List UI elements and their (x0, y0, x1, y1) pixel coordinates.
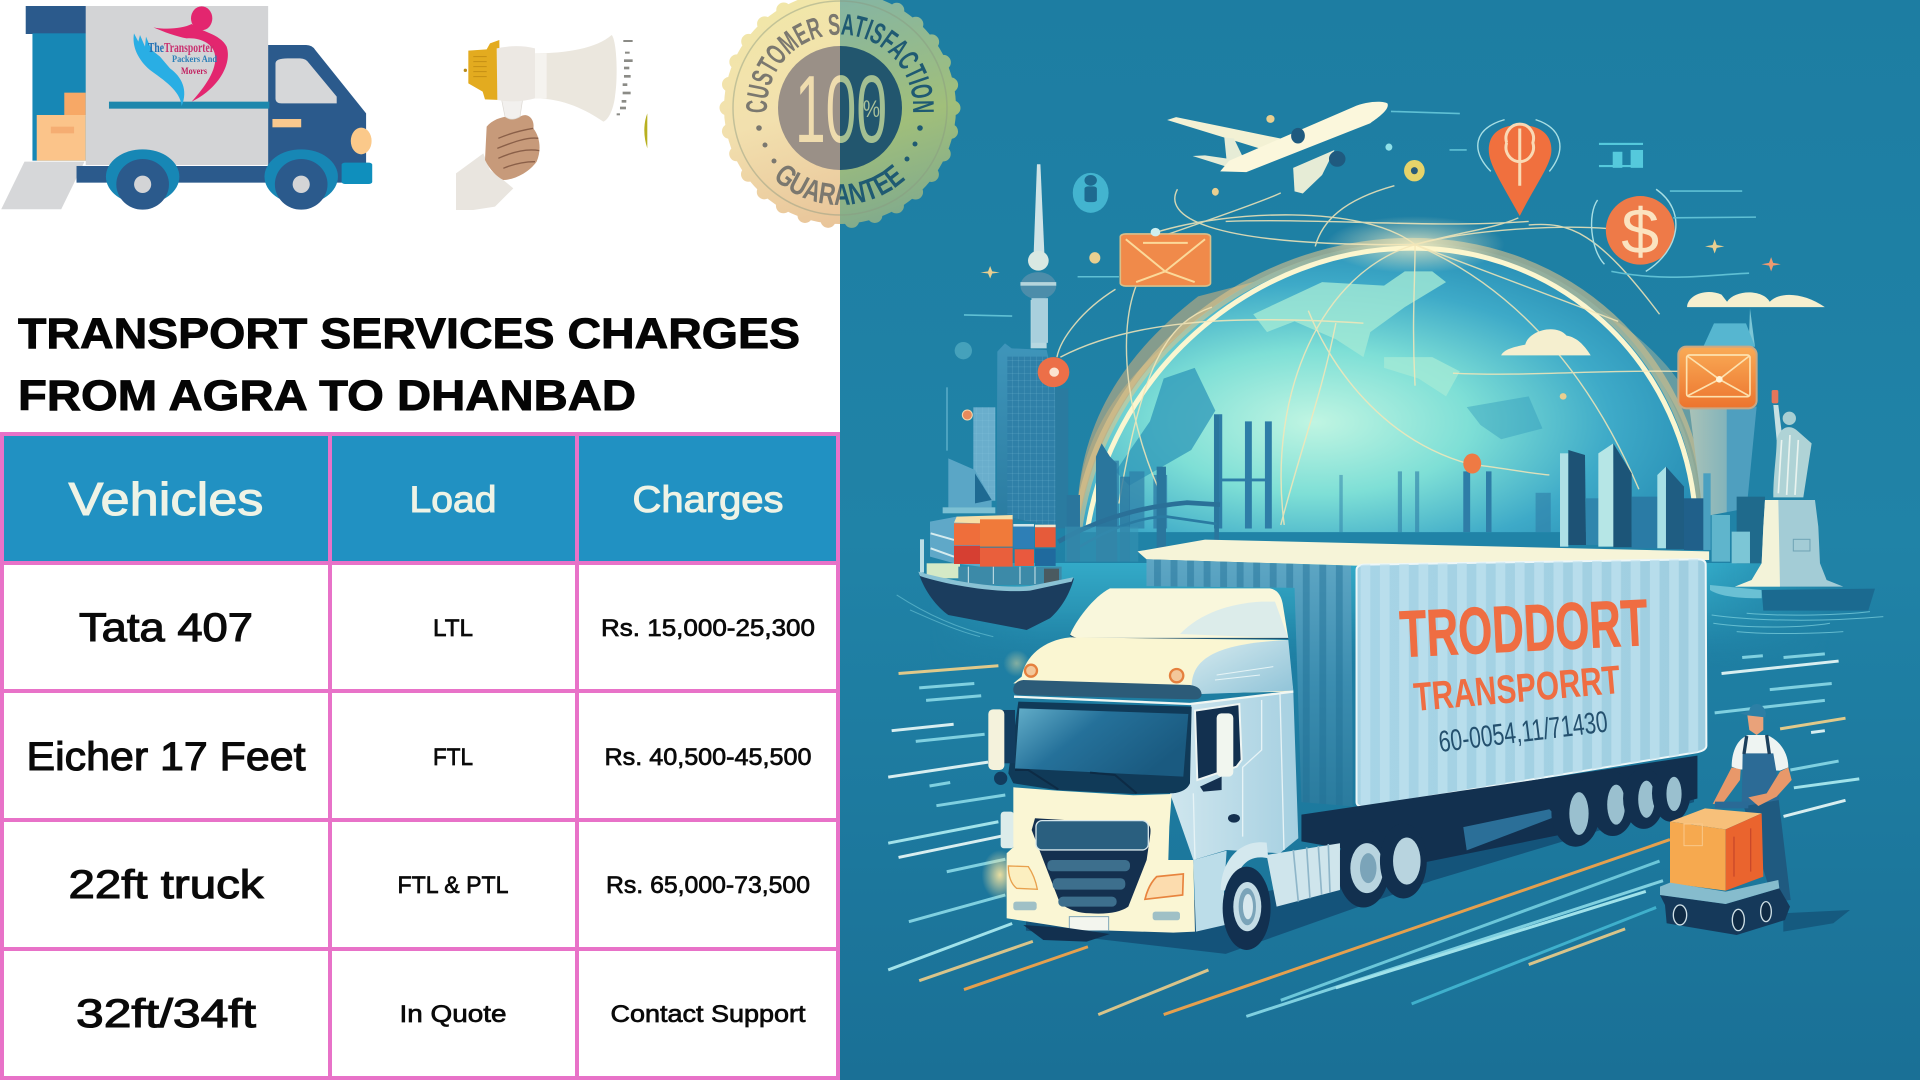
sparkles and dots (980, 115, 1781, 400)
fog lamps (1013, 902, 1180, 920)
seal right half (840, 0, 960, 228)
load: FTL & PTL: FTL & PTL (398, 872, 508, 899)
charge: 22ft truck: Rs. 65,000-73,500 (606, 872, 810, 899)
skyline behind bridge (1067, 415, 1219, 562)
front wheel (1223, 867, 1271, 950)
megaphone handle (502, 99, 523, 119)
worker legs (1743, 797, 1791, 902)
seal top text: CUSTOMER SATISFACTION (746, 14, 934, 112)
icon: yellow node (1404, 160, 1425, 181)
upper cab cream (1013, 637, 1293, 693)
icon: fingerprint badge (955, 342, 972, 359)
panel: transport illustration (840, 0, 1920, 1080)
streaks on cab side (1215, 667, 1273, 680)
thin pole (946, 387, 948, 451)
icon: small chart (1599, 143, 1643, 168)
front tyre shadow (1023, 925, 1110, 942)
skyline towers (1560, 443, 1765, 563)
van body (86, 6, 268, 165)
trailer subtitle: TRANSPORRT (1412, 658, 1622, 720)
right headlight (1145, 874, 1183, 899)
icon: orange marker (1038, 357, 1069, 387)
icon: dollar coin: $ (1621, 196, 1659, 268)
trailer wheels (1551, 765, 1691, 847)
white left panel (0, 0, 840, 1080)
trailer rear side (1146, 559, 1353, 806)
satisfaction seal (720, 0, 960, 228)
trailer brand: TRODDORT (1398, 585, 1649, 671)
icon: airplane (1167, 102, 1388, 194)
vehicle: Eicher 17 Feet: Eicher 17 Feet (26, 735, 306, 779)
trolley handle (1715, 802, 1748, 808)
van stripe (109, 102, 269, 109)
left headlight (1008, 866, 1037, 889)
charges column (601, 615, 815, 1028)
sleeve (456, 153, 513, 210)
left city seen on the harbour (943, 300, 1220, 562)
charge: 32ft/34ft: Contact Support (610, 1001, 806, 1028)
globe with network arcs (1057, 186, 1707, 532)
route lines (1057, 186, 1680, 525)
narrow dark tower (1055, 388, 1068, 528)
fuel tank (1267, 843, 1340, 907)
road shadow under truck (1026, 791, 1694, 954)
licence plate (1069, 917, 1109, 931)
outer tan crescent left (1077, 279, 1267, 529)
pillar (1001, 812, 1014, 848)
trolley shadow (1783, 910, 1850, 932)
title line 1: TRANSPORT SERVICES CHARGES (18, 310, 800, 358)
door seams (1193, 693, 1284, 860)
wipers (1015, 770, 1137, 793)
trailer number: 60-0054,11/71430 (1437, 705, 1610, 759)
tractor rear wheels (1337, 824, 1427, 907)
header: vehicles: Vehicles (68, 473, 264, 525)
charge: Tata 407: Rs. 15,000-25,300 (601, 615, 815, 642)
icon: envelope left (1120, 234, 1211, 286)
visor trim (1014, 692, 1293, 704)
statue island (1710, 585, 1875, 611)
tower shaft lower (1031, 300, 1047, 348)
van cab (268, 45, 366, 167)
worker overalls (1742, 753, 1779, 807)
stacked containers (930, 515, 1056, 567)
dark landmass (1115, 368, 1215, 486)
seal ring (733, 1, 947, 215)
deck containers lower (920, 539, 1062, 585)
seal dots (756, 125, 923, 164)
header: charges: Charges (632, 479, 784, 520)
thin air streaks (964, 111, 1756, 316)
logo tagline: Packers And (172, 54, 217, 64)
hull gunwale (918, 572, 1073, 591)
roof fairing (1070, 588, 1288, 638)
trailer lettering (1398, 585, 1649, 759)
globe dome (1078, 243, 1701, 532)
fairing seam (1070, 635, 1288, 638)
ship water ripples (897, 595, 993, 637)
wheel arch (1221, 842, 1268, 892)
worker head (1747, 715, 1763, 735)
bridge underside water (1065, 527, 1138, 562)
seal disk right (840, 46, 902, 170)
van door handle (272, 119, 301, 127)
load: FTL: FTL (433, 744, 473, 771)
grille (1032, 818, 1151, 914)
delivery van illustration (1, 6, 372, 210)
seal number: 100 (795, 56, 887, 163)
seal left half (720, 0, 840, 228)
van wheels (106, 149, 338, 210)
trailer roof (1138, 540, 1709, 566)
overall straps (1744, 735, 1769, 754)
sun visor (1013, 680, 1202, 699)
chassis (1301, 756, 1697, 863)
megaphone photo (456, 35, 647, 210)
statue (1772, 390, 1812, 497)
worker with trolley (1660, 704, 1850, 935)
cloud small (1687, 292, 1825, 307)
low glass block (943, 458, 995, 513)
continents (1253, 271, 1460, 396)
truck scene (888, 540, 1859, 1016)
bright dome rim (1078, 243, 1701, 527)
trolley (1660, 880, 1790, 935)
city and icons above the globe (964, 102, 1825, 474)
right mirror (1200, 713, 1233, 792)
charge: Eicher 17 Feet: Rs. 40,500-45,500 (604, 744, 812, 771)
header: load: Load (410, 479, 496, 520)
table header background (0, 433, 840, 563)
building behind envelope (1689, 308, 1757, 517)
faint landmass right (1467, 396, 1542, 439)
finger creases (497, 128, 539, 168)
icon: dollar coin (1592, 189, 1676, 271)
secondary tower (973, 407, 995, 501)
headlight glow (982, 850, 1018, 900)
container ship (897, 515, 1074, 637)
cab front lower (1007, 787, 1195, 933)
envelope right (1678, 347, 1757, 408)
table grid (0, 433, 840, 1080)
van window (275, 58, 337, 103)
vehicle: 22ft truck: 22ft truck (68, 863, 265, 907)
seal disk left (778, 46, 840, 170)
door handle (1228, 814, 1240, 823)
van headlight (351, 128, 372, 154)
vehicle: Tata 407: Tata 407 (79, 606, 253, 650)
van bumper (342, 163, 372, 184)
pricing table (0, 433, 840, 1080)
megaphone horn (535, 35, 617, 122)
icon: route marker (1463, 454, 1481, 474)
logo movers: Movers (181, 66, 207, 76)
right city and statue (1560, 308, 1883, 634)
worker cap (1740, 704, 1766, 717)
statue pedestal (1735, 500, 1843, 587)
glow (1326, 216, 1505, 273)
door panel (1170, 692, 1298, 860)
tan glow right of rim (1460, 250, 1707, 500)
skyline inside the globe (1098, 414, 1551, 532)
main skyscraper (997, 343, 1056, 527)
load: LTL: LTL (433, 615, 473, 642)
van chassis (77, 166, 343, 183)
side window (1195, 704, 1242, 780)
icon: location pin (1478, 120, 1560, 216)
bridge (1058, 503, 1220, 547)
ship hull (919, 575, 1074, 630)
speed lines (888, 654, 1859, 1016)
megaphone back (464, 40, 500, 100)
van loading ramp (1, 162, 84, 209)
icon: person badge (1073, 173, 1109, 213)
load column (398, 615, 508, 1028)
amber roof lights (1025, 665, 1183, 682)
vehicles column (26, 606, 306, 1036)
trailer side panel (1357, 559, 1706, 807)
logo name: TheTransporter (148, 41, 214, 56)
icon: TV tower (1020, 164, 1056, 343)
title (18, 310, 800, 420)
harbour water (960, 563, 1794, 634)
water ripples (1712, 612, 1883, 634)
cloud large (1501, 329, 1591, 355)
van cargo area (26, 6, 86, 161)
background (840, 0, 1920, 1080)
windshield glass (1015, 708, 1188, 777)
company logo (134, 6, 228, 106)
horn collar (535, 53, 547, 99)
parcel (1670, 808, 1763, 891)
olive edge (644, 113, 647, 148)
title line 2: FROM AGRA TO DHANBAD (18, 372, 636, 420)
megaphone body (497, 46, 535, 101)
left mirror (988, 709, 1015, 785)
seal percent: % (863, 96, 880, 123)
lower cab side (1193, 851, 1227, 932)
vehicle: 32ft/34ft: 32ft/34ft (76, 992, 256, 1036)
upper cab side blue (1192, 640, 1293, 694)
load: In Quote: In Quote (400, 1001, 506, 1028)
worker shirt (1732, 735, 1788, 771)
windshield frame (1008, 702, 1192, 794)
truck cab (982, 588, 1340, 950)
small pin (962, 410, 972, 420)
specks (617, 40, 633, 115)
worker arms (1713, 767, 1792, 806)
seal bottom text: GUARANTEE (776, 164, 906, 205)
side glow (1003, 650, 1030, 677)
logo graphic (134, 6, 228, 106)
table header text (68, 473, 784, 525)
tan glow left of rim (1077, 243, 1412, 527)
fairing side shade (1180, 602, 1288, 638)
hand (485, 115, 540, 180)
